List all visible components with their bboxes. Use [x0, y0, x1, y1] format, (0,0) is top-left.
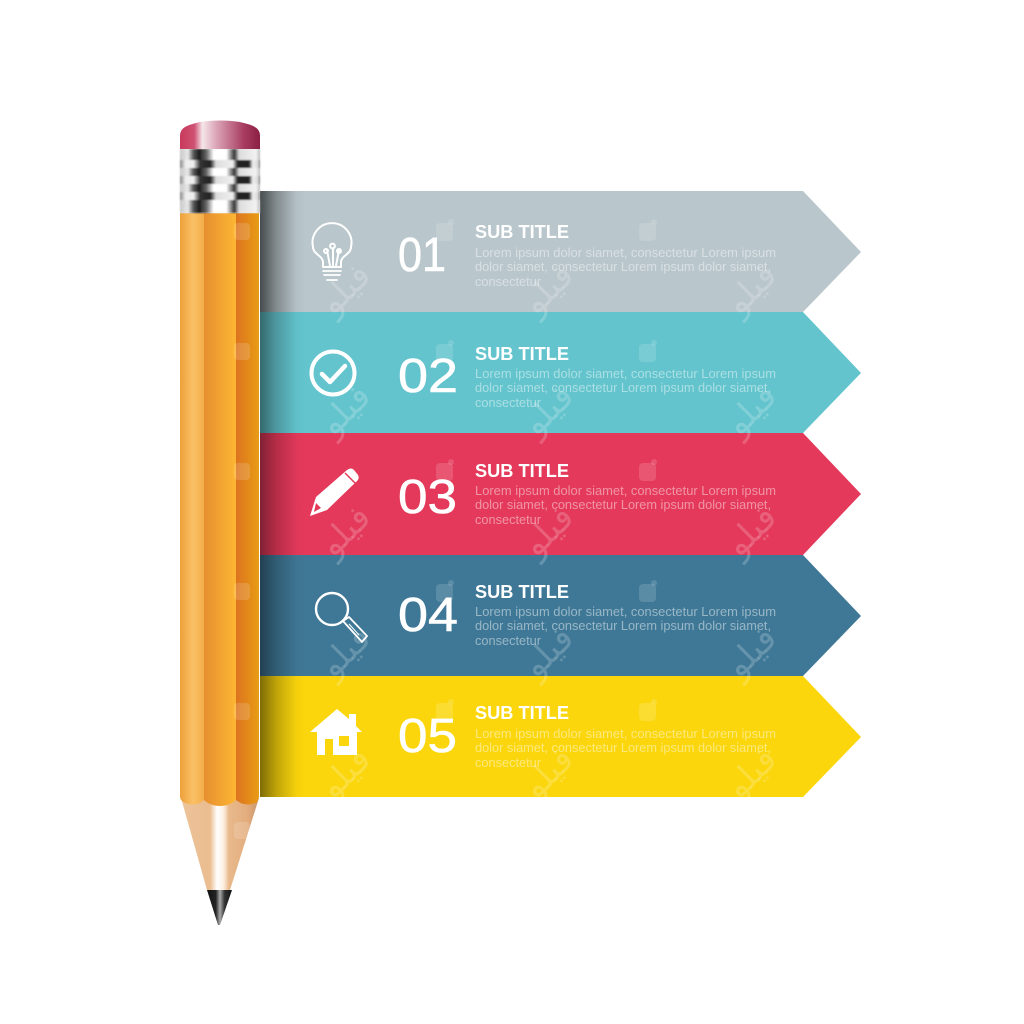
watermark text: فيلو [310, 740, 379, 808]
watermark text: فيلو [513, 498, 582, 566]
watermark text [310, 256, 785, 808]
pencil body [180, 213, 259, 806]
metal ferrule [180, 149, 260, 213]
watermark text: فيلو [716, 740, 785, 808]
number 05: 05 [398, 710, 457, 763]
watermark text: فيلو [513, 740, 582, 808]
watermark text: فيلو [310, 256, 379, 324]
watermark text: فيلو [513, 377, 582, 445]
graphite lead [207, 890, 232, 925]
icon: light bulb [312, 223, 352, 280]
body text 05: consectetur [475, 756, 541, 770]
number 03: 03 [398, 471, 457, 524]
watermark text: فيلو [716, 256, 785, 324]
watermark text: فيلو [310, 377, 379, 445]
icon: pencil [310, 468, 359, 516]
body text 05: Lorem ipsum dolor siamet, consectetur Lorem ipsum [475, 727, 776, 741]
watermark text: فيلو [716, 498, 785, 566]
subtitle 03: SUB TITLE [475, 460, 569, 481]
subtitle 01: SUB TITLE [475, 221, 569, 242]
panel: band 03 [260, 433, 861, 555]
subtitle 02: SUB TITLE [475, 343, 569, 364]
body text 01: Lorem ipsum dolor siamet, consectetur Lorem ipsum [475, 246, 776, 260]
body text 04: dolor siamet, consectetur Lorem ipsum dolor siamet, [475, 619, 771, 633]
body text 02: consectetur [475, 396, 541, 410]
watermark text: فيلو [513, 256, 582, 324]
number 01: 01 [398, 229, 446, 282]
icon: magnifier [316, 593, 367, 642]
watermark text: فيلو [716, 619, 785, 687]
watermark text: فيلو [513, 619, 582, 687]
body text 03: consectetur [475, 513, 541, 527]
pencil [180, 120, 260, 925]
panel: band 05 [260, 676, 861, 797]
icon: check circle [312, 352, 354, 394]
body text 04: consectetur [475, 634, 541, 648]
body text 02: dolor siamet, consectetur Lorem ipsum dolor siamet, [475, 381, 771, 395]
watermark text: فيلو [310, 619, 379, 687]
panel: band 02 [260, 312, 861, 433]
watermark logos [436, 219, 657, 721]
number 02: 02 [398, 350, 458, 403]
pencil watermark logos [234, 223, 250, 839]
number 04: 04 [398, 589, 458, 642]
body text 04: Lorem ipsum dolor siamet, consectetur Lorem ipsum [475, 605, 776, 619]
body text 05: dolor siamet, consectetur Lorem ipsum dolor siamet, [475, 741, 771, 755]
eraser [180, 120, 260, 149]
body text 03: Lorem ipsum dolor siamet, consectetur Lorem ipsum [475, 484, 776, 498]
wood tip [181, 798, 259, 890]
subtitle 05: SUB TITLE [475, 702, 569, 723]
panel: band 04 [260, 555, 861, 676]
body text 03: dolor siamet, consectetur Lorem ipsum dolor siamet, [475, 498, 771, 512]
watermark text: فيلو [716, 377, 785, 445]
body text 02: Lorem ipsum dolor siamet, consectetur Lorem ipsum [475, 367, 776, 381]
subtitle 04: SUB TITLE [475, 581, 569, 602]
watermark text: فيلو [310, 498, 379, 566]
icon: house [310, 709, 362, 755]
panel: band 01 [260, 191, 861, 312]
body text 01: dolor siamet, consectetur Lorem ipsum dolor siamet, [475, 260, 771, 274]
body text 01: consectetur [475, 275, 541, 289]
